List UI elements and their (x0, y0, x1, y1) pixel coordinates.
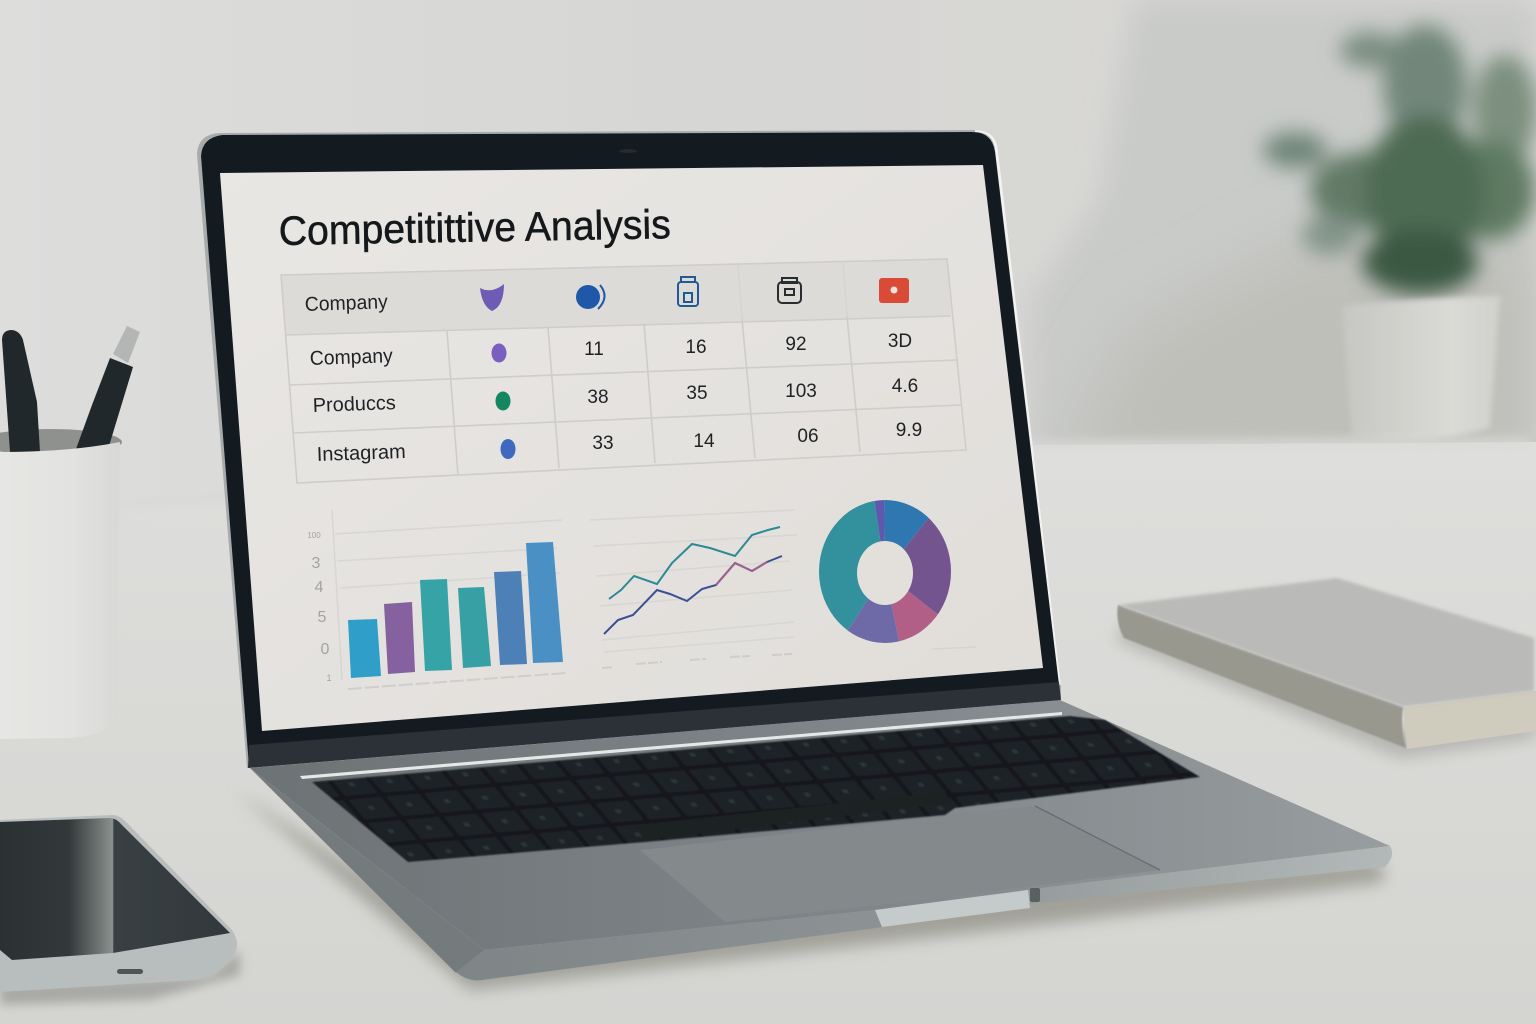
plant pot (1342, 296, 1500, 440)
row dot: green (496, 392, 510, 410)
phone port (117, 969, 143, 974)
laptop lid (197, 130, 1061, 768)
desk surface (0, 442, 1536, 1024)
desk back edge softening (6, 442, 1530, 512)
row labels (304, 291, 406, 466)
base front edge (456, 846, 1392, 980)
header icon: jar (678, 277, 698, 306)
row dot: purple (492, 344, 506, 362)
phone shadow (0, 950, 240, 1005)
notebook pages (1403, 691, 1536, 749)
row labels: Instagram (316, 441, 406, 466)
hinge highlight (300, 712, 1062, 779)
title: Competitittive Analysis (278, 201, 671, 254)
front notch (875, 890, 1030, 927)
base side lip (250, 768, 484, 980)
blurred plant (1263, 25, 1536, 294)
screen (220, 165, 1043, 731)
chin (248, 682, 1061, 768)
trackpad (640, 806, 1160, 922)
bar chart axis labels: 100 (307, 531, 321, 540)
teal series (609, 527, 780, 599)
bar chart axis labels: 4 (315, 579, 324, 596)
row labels: Company (304, 291, 388, 316)
cup body (0, 442, 120, 739)
comparison table (281, 259, 966, 483)
row labels: Company (309, 345, 393, 370)
row dot: blue (500, 439, 516, 459)
bar chart (307, 510, 566, 689)
table values: 06 (797, 426, 819, 447)
plant foliage (1263, 25, 1536, 294)
bar chart grid (332, 510, 562, 680)
notebook (1115, 578, 1536, 758)
line chart (590, 510, 797, 668)
bar chart axis labels: 0 (321, 641, 330, 658)
bar chart axis labels (307, 531, 332, 683)
notebook shadow (1115, 620, 1536, 758)
laptop base (250, 700, 1392, 980)
pen: dark (2, 330, 40, 452)
bar chart axis labels: 1 (326, 673, 332, 683)
table values: 16 (685, 337, 707, 358)
header icon: blue swirl (576, 285, 605, 309)
line chart grid (590, 510, 797, 652)
phone (0, 815, 240, 1005)
laptop (197, 130, 1392, 980)
table values: 3D (888, 331, 912, 352)
notebook spine (1117, 605, 1406, 748)
donut segments (819, 500, 951, 643)
pink segment (716, 562, 767, 585)
table values (584, 331, 922, 454)
background wall (0, 0, 1536, 520)
cup interior (0, 429, 122, 455)
notebook cover (1118, 578, 1534, 707)
header icon: red square (879, 278, 909, 303)
phone body (0, 815, 237, 992)
spacebar (636, 792, 950, 840)
lid frame (201, 132, 1059, 766)
table values: 103 (785, 381, 817, 402)
table values: 9.9 (896, 420, 922, 441)
table grid (281, 259, 966, 483)
table values: 11 (584, 339, 604, 360)
bar chart axis labels: 5 (318, 609, 327, 626)
navy series (604, 556, 782, 634)
pen cup with pens (0, 326, 140, 739)
donut chart (819, 500, 976, 650)
table header band (281, 259, 951, 335)
row labels: Produccs (312, 392, 396, 417)
header icon: dark jar (778, 278, 801, 303)
camera (619, 149, 637, 153)
bar chart footnote (348, 673, 566, 689)
table values: 35 (686, 383, 708, 404)
header icon: purple shield (480, 284, 504, 311)
table values: 33 (592, 433, 614, 454)
bar chart axis labels: 3 (312, 555, 321, 572)
phone screen (0, 818, 230, 960)
line chart axis ticks (602, 654, 792, 668)
wall shadow lower (1088, 250, 1536, 442)
table values: 92 (785, 334, 807, 355)
lid rim (197, 130, 1061, 768)
laptop shadow (235, 790, 1385, 990)
donut hole (857, 541, 913, 605)
table values: 4.6 (892, 376, 918, 397)
keyboard (312, 716, 1200, 862)
table values: 38 (587, 387, 609, 408)
pen: grey tip (76, 326, 140, 449)
lid white edge (975, 130, 1061, 685)
table values: 14 (693, 431, 715, 452)
bars (348, 542, 563, 678)
wall shadow right (1032, 0, 1535, 438)
donut baseline (932, 647, 976, 649)
base deck (250, 700, 1390, 950)
